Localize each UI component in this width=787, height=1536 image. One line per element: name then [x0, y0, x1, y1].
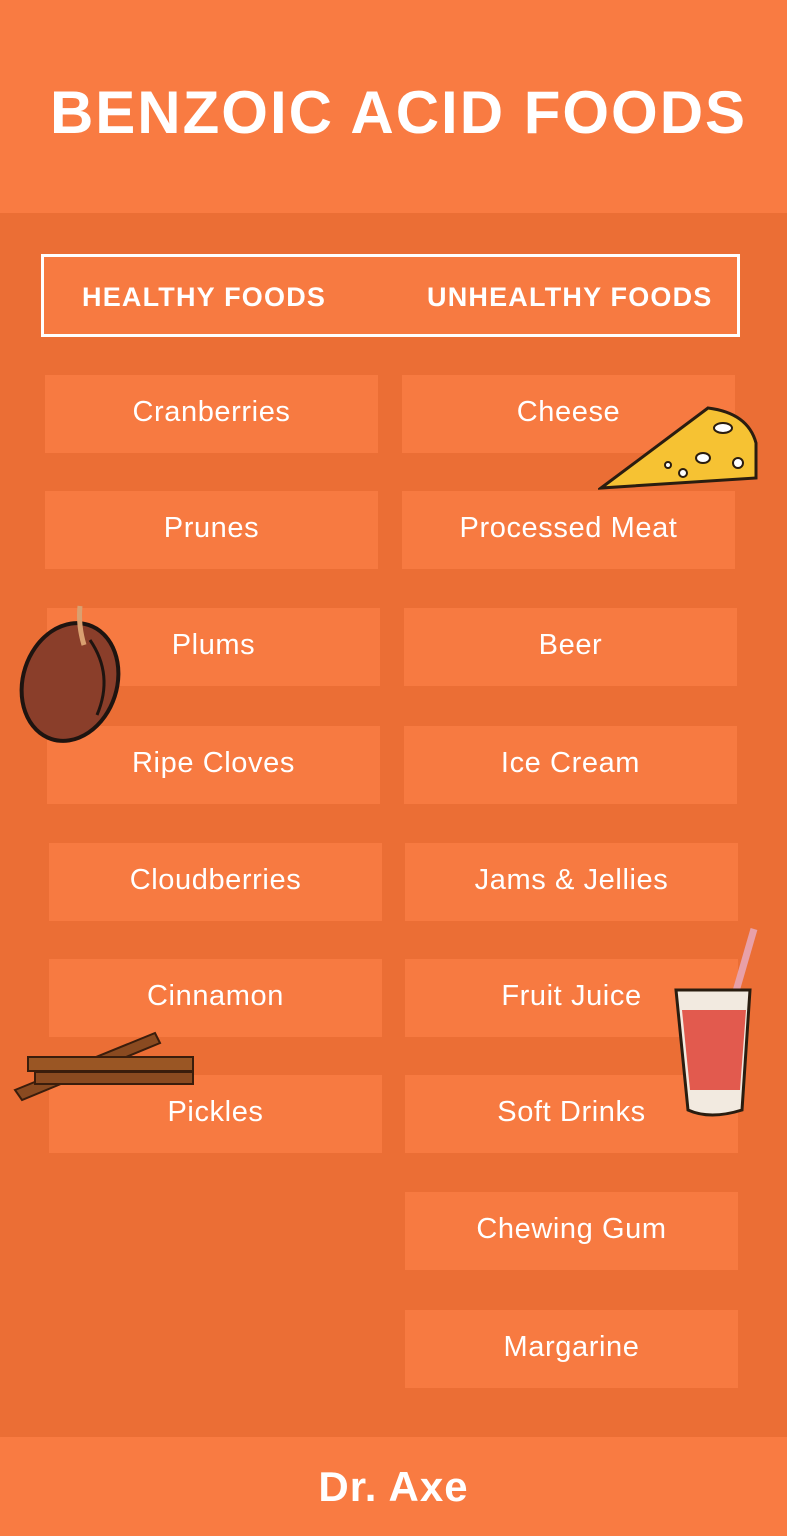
item [45, 491, 378, 569]
item: Ice Cream [501, 747, 640, 779]
header [0, 0, 787, 213]
column headings [41, 254, 740, 337]
item [405, 843, 738, 921]
item [404, 726, 737, 804]
item [47, 726, 380, 804]
footer [0, 1437, 787, 1536]
item [404, 608, 737, 686]
item: Prunes [164, 512, 259, 544]
icon: plum [20, 606, 120, 743]
item [49, 959, 382, 1037]
list: unhealthy foods [402, 375, 738, 1388]
item [405, 959, 738, 1037]
item [405, 1310, 738, 1388]
item: Ripe Cloves [132, 747, 295, 779]
list: healthy foods [45, 375, 382, 1153]
item: Margarine [504, 1331, 639, 1363]
item: Cloudberries [130, 864, 301, 896]
item: Pickles [167, 1096, 264, 1128]
item [402, 375, 735, 453]
item: Chewing Gum [476, 1213, 667, 1245]
item [49, 843, 382, 921]
title: BENZOIC ACID FOODS [50, 79, 747, 146]
heading: healthy: HEALTHY FOODS [82, 282, 326, 312]
item [49, 1075, 382, 1153]
item: Beer [539, 629, 602, 661]
icon: cheese [598, 406, 758, 490]
footer: Dr. Axe [318, 1463, 469, 1510]
item: Plums [172, 629, 255, 661]
item [405, 1075, 738, 1153]
item [402, 491, 735, 569]
item: Jams & Jellies [475, 864, 668, 896]
icon: juice glass [674, 928, 758, 1116]
heading: unhealthy: UNHEALTHY FOODS [427, 282, 713, 312]
item: Soft Drinks [497, 1096, 646, 1128]
item [47, 608, 380, 686]
icon: cinnamon [14, 1032, 194, 1102]
item: Processed Meat [460, 512, 677, 544]
item: Fruit Juice [501, 980, 642, 1012]
item: Cranberries [132, 396, 291, 428]
item: Cheese [517, 396, 620, 428]
item [405, 1192, 738, 1270]
item [45, 375, 378, 453]
item: Cinnamon [147, 980, 284, 1012]
